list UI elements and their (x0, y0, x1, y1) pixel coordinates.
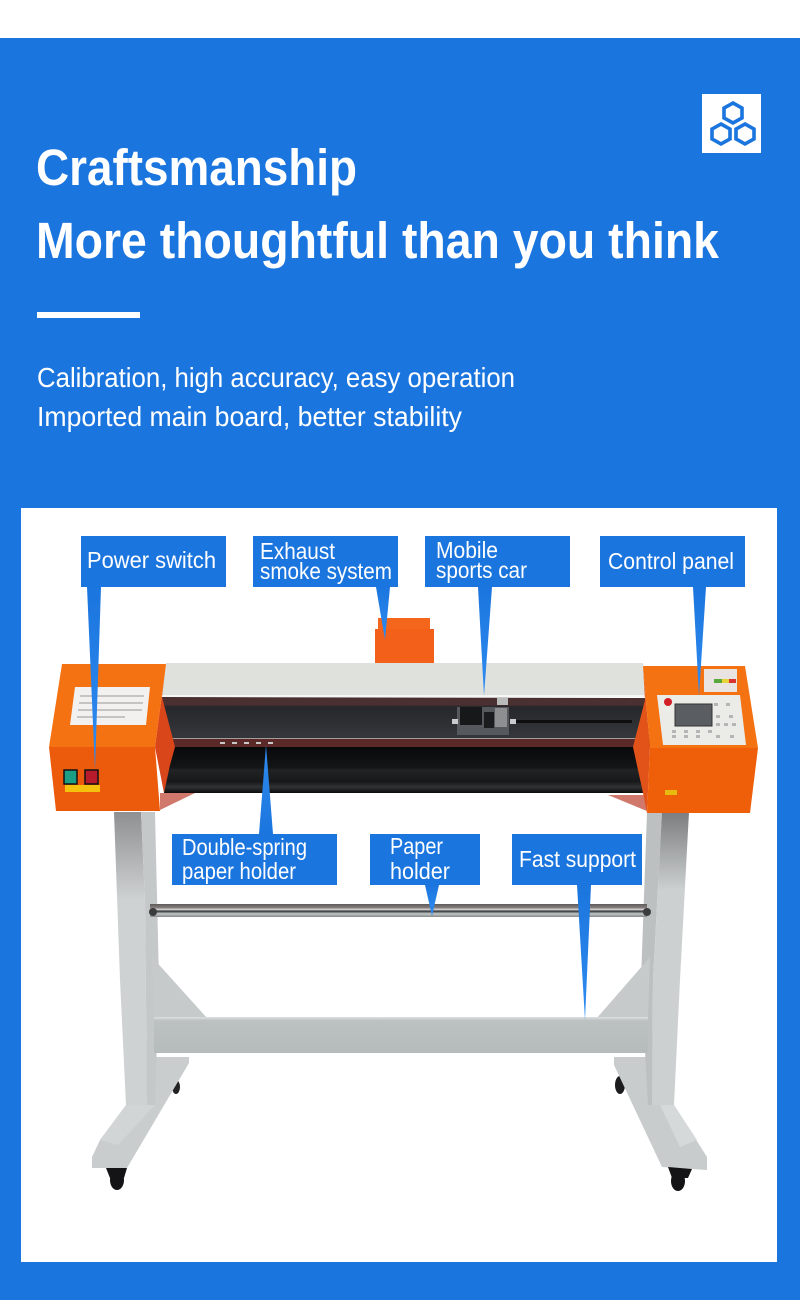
LCD screen (675, 704, 712, 726)
paper rod (150, 904, 647, 917)
divider bar (37, 312, 140, 318)
callout: mobile sports car: sports car (436, 557, 527, 583)
subtitle text: Calibration, high accuracy, easy operation (37, 362, 515, 393)
subtitle text: Imported main board, better stability (37, 401, 462, 432)
callout: mobile sports car (425, 536, 570, 587)
callout: exhaust smoke system: smoke system (260, 558, 392, 584)
inner rail (510, 720, 632, 723)
right bracket shadow (608, 795, 647, 811)
callout: paper holder (370, 833, 480, 885)
right control box (633, 666, 758, 813)
callout: paper holder: holder (390, 858, 450, 884)
callout pointers (87, 587, 706, 1020)
gauge (704, 669, 737, 692)
icon: three hexagons (702, 94, 761, 153)
window edge highlight (163, 695, 645, 697)
callout: exhaust smoke system: Exhaust (260, 538, 336, 564)
right gusset (596, 957, 650, 1019)
callout: exhaust smoke system (253, 536, 398, 587)
callout: double-spring paper holder: Double-spring (182, 834, 307, 860)
label sticker (70, 687, 150, 725)
right leg (641, 812, 689, 1105)
callout: power switch: Power switch (87, 547, 216, 573)
right rear caster (615, 1076, 625, 1094)
stop button (664, 698, 672, 706)
callout: fast support (512, 834, 642, 885)
spring holders (220, 742, 273, 744)
product: cutting plotter machine (49, 618, 758, 1191)
glass window (158, 697, 650, 746)
title: Craftsmanship (36, 139, 357, 196)
rod end bolts (149, 908, 157, 916)
callout: control panel (600, 536, 745, 587)
left leg (114, 812, 159, 1105)
callout: fast support: Fast support (519, 846, 637, 872)
window lower ledge (158, 739, 650, 747)
subtitle text (37, 362, 515, 432)
right front caster (668, 1167, 692, 1191)
black roller platen (164, 747, 643, 793)
glass ledge line (158, 738, 650, 740)
title: More thoughtful than you think (36, 212, 720, 269)
callout: control panel: Control panel (608, 548, 734, 574)
left front caster (106, 1168, 127, 1190)
left bracket shadow (160, 793, 195, 810)
left stand foot (92, 1057, 189, 1190)
right stand foot (614, 1057, 707, 1191)
keypad keys (672, 703, 736, 738)
callout: power switch (81, 536, 226, 587)
callout: mobile sports car: Mobile (436, 537, 498, 563)
left rear caster (172, 1080, 180, 1094)
title (36, 139, 720, 269)
carriage (452, 698, 516, 735)
callout: double-spring paper holder (172, 834, 337, 885)
left gusset (152, 957, 207, 1018)
top cover (162, 663, 645, 697)
power switches (64, 770, 77, 784)
panel: white product area (21, 508, 777, 1262)
crossbar (154, 1017, 648, 1053)
left control box (49, 664, 175, 811)
keypad panel (657, 695, 746, 745)
callout: paper holder: Paper (390, 833, 443, 859)
exhaust duct (375, 618, 434, 663)
callout: double-spring paper holder: paper holder (182, 858, 296, 884)
